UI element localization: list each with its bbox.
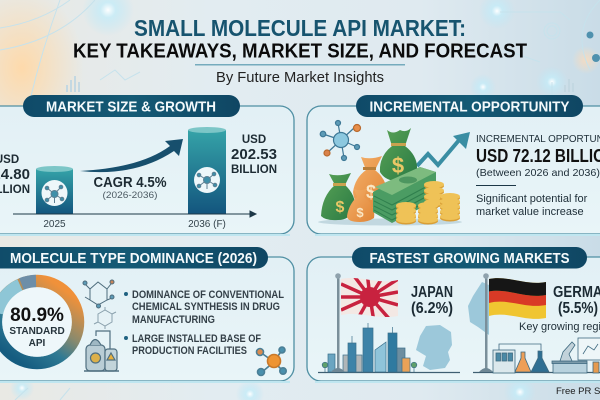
- icon: trend arrow: [417, 139, 460, 166]
- bullet list: CHEMICAL SYNTHESIS IN DRUG: [132, 301, 280, 313]
- map: Germany silhouettes: [416, 282, 489, 370]
- heading: incremental opportunity: INCREMENTAL OPPORTUNITY: [370, 100, 570, 116]
- title: KEY TAKEAWAYS, MARKET SIZE, AND FORECAST: [73, 40, 527, 62]
- heading: fastest growing markets: FASTEST GROWING MARKETS: [370, 251, 570, 267]
- icon: orange molecule: [256, 347, 286, 376]
- donut label: 80.9%: [10, 305, 64, 326]
- illustration: laboratory: [493, 338, 600, 373]
- growth arrow: [80, 139, 183, 172]
- heading: market size and growth: [23, 95, 240, 117]
- axis label 2036: 2036 (F): [188, 219, 226, 230]
- heading: fastest growing markets: [352, 247, 587, 268]
- icon: chemical structures: [83, 280, 116, 329]
- axis: [13, 211, 256, 217]
- incremental opportunity text: Significant potential for: [476, 193, 588, 205]
- panel: incremental opportunity: [307, 95, 600, 235]
- value label 2036: USD: [242, 134, 266, 146]
- icon: money bags and coins: [318, 128, 462, 226]
- heading: molecule type dominance: MOLECULE TYPE DOMINANCE (2026): [10, 251, 257, 267]
- CAGR label: [94, 174, 166, 201]
- illustration: city skyline: [322, 323, 417, 372]
- label: Japan: (6.2%): [411, 300, 453, 317]
- heading: market size and growth: MARKET SIZE & GROWTH: [46, 100, 216, 116]
- bar 2025: [36, 166, 73, 214]
- bullet list: MANUFACTURING: [132, 314, 215, 326]
- icon: Germany flag: [479, 272, 546, 372]
- title: [73, 15, 527, 86]
- ground lines: [318, 372, 600, 374]
- bullet list: [124, 289, 284, 357]
- bullet list: PRODUCTION FACILITIES: [132, 345, 247, 357]
- icon: chemical tanks: [84, 331, 119, 371]
- value label 2036: 202.53: [231, 146, 277, 163]
- panel: market size and growth: [0, 95, 294, 235]
- icon: Japan flag: [331, 272, 398, 372]
- label: Germany: [553, 284, 600, 317]
- donut label: API: [29, 338, 46, 349]
- icon: money bags and coins: $: [366, 182, 376, 202]
- icon: money bags and coins: $: [392, 153, 404, 178]
- icon: arrow head: [453, 132, 470, 149]
- icon: molecule: [320, 120, 360, 160]
- bullet list: DOMINANCE OF CONVENTIONAL: [132, 289, 284, 301]
- incremental opportunity text: market value increase: [476, 206, 584, 218]
- panel: fastest growing markets: [307, 247, 600, 382]
- label: Japan: [411, 284, 453, 317]
- panel: molecule type dominance: [0, 247, 294, 382]
- incremental opportunity text: (Between 2026 and 2036): [476, 167, 600, 179]
- value label 2036: BILLION: [231, 164, 277, 176]
- incremental opportunity text: [476, 133, 600, 218]
- donut chart: [0, 281, 78, 363]
- CAGR label: (2026-2036): [102, 190, 158, 201]
- title: SMALL MOLECULE API MARKET:: [134, 15, 466, 41]
- heading: incremental opportunity: [356, 95, 583, 117]
- donut label: [9, 305, 65, 349]
- icon: money bags and coins: $: [356, 205, 364, 220]
- bullet list: LARGE INSTALLED BASE OF: [132, 333, 261, 345]
- axis label 2025: 2025: [43, 219, 66, 230]
- label: Japan: JAPAN: [411, 284, 453, 301]
- title: By Future Market Insights: [216, 70, 384, 86]
- CAGR label: CAGR 4.5%: [94, 174, 166, 191]
- donut label: STANDARD: [9, 326, 65, 337]
- icon: money bags and coins: $: [336, 199, 345, 216]
- bar 2036: [188, 127, 226, 214]
